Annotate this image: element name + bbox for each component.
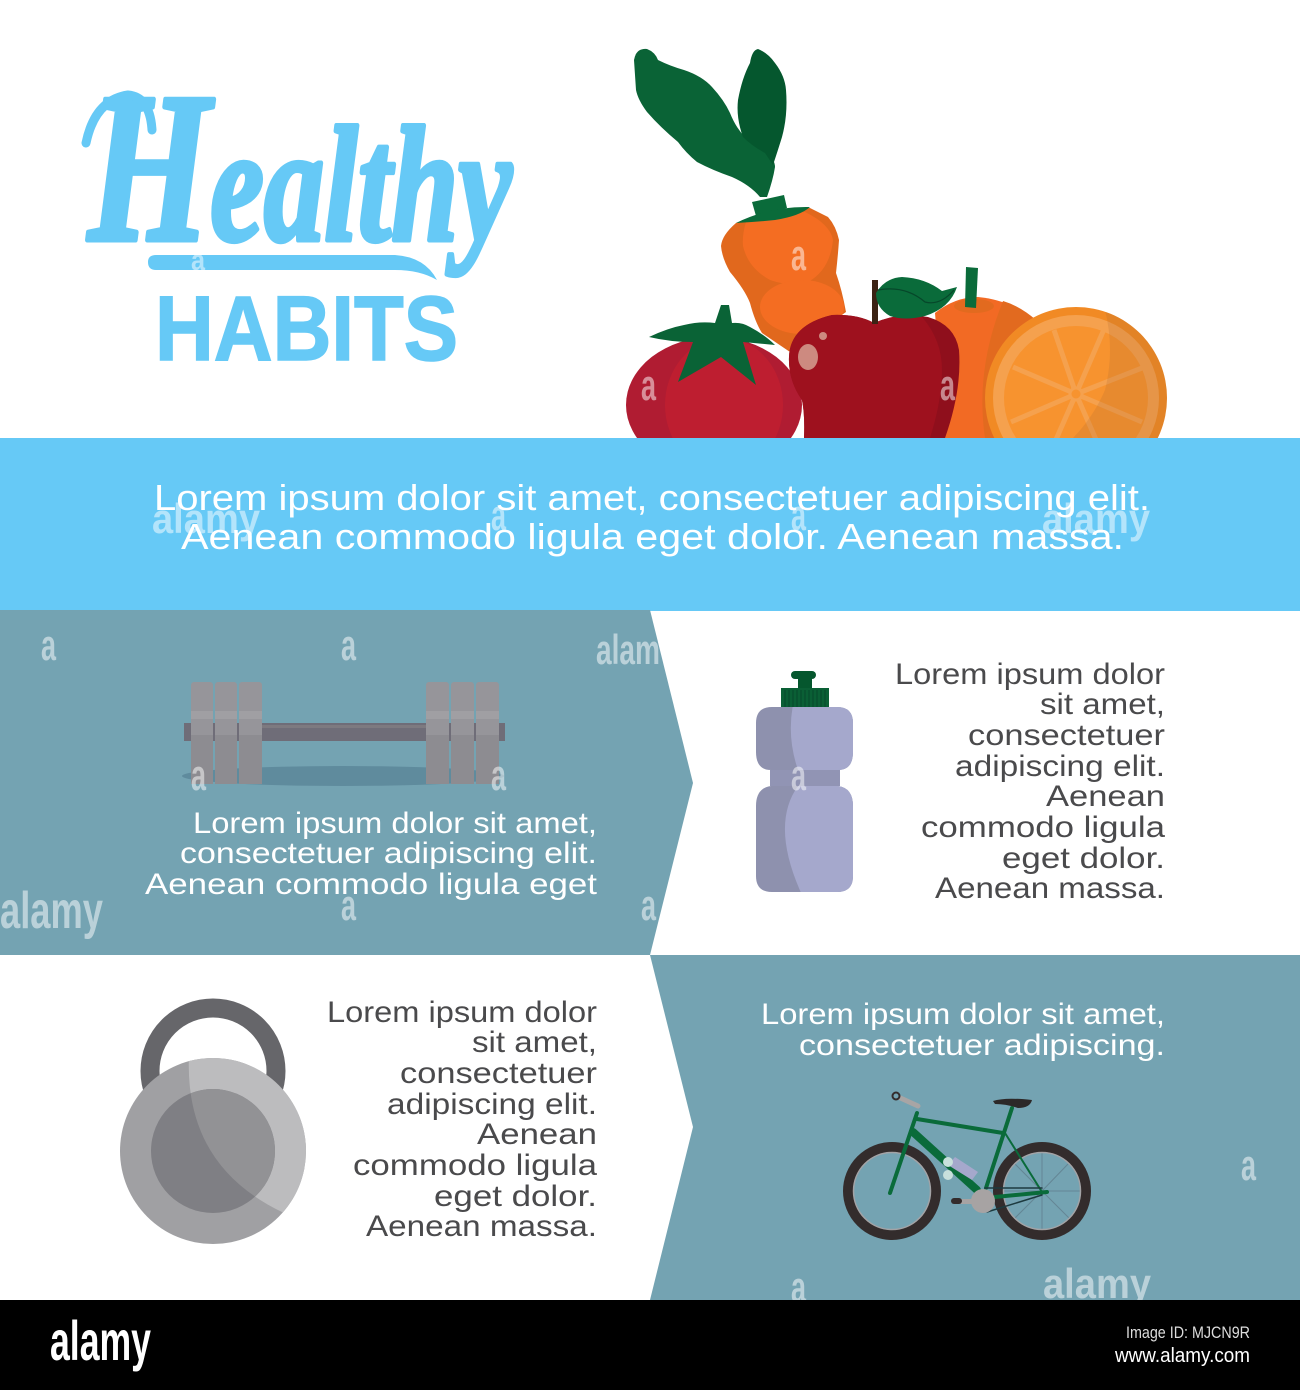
bottle text: consectetuer xyxy=(968,719,1165,752)
icon: apple xyxy=(789,277,959,438)
panel: bicycle xyxy=(650,955,1300,1300)
icon: tomato xyxy=(626,305,802,438)
bicycle text: Lorem ipsum dolor sit amet, xyxy=(761,998,1165,1031)
bottle text: adipiscing elit. xyxy=(955,750,1165,783)
kettlebell text: Lorem ipsum dolor xyxy=(327,996,597,1029)
stock watermarks xyxy=(0,231,1256,1312)
kettlebell text: Aenean xyxy=(477,1118,597,1151)
stock watermarks: a xyxy=(491,751,506,800)
kettlebell text: sit amet, xyxy=(472,1026,597,1059)
title underline swoosh xyxy=(148,255,437,280)
stock watermarks: a xyxy=(191,244,205,277)
stock watermarks: a xyxy=(791,751,806,800)
title: Healthy Habits xyxy=(86,48,513,380)
kettlebell text: commodo ligula xyxy=(353,1149,597,1182)
kettlebell text: adipiscing elit. xyxy=(387,1088,597,1121)
bicycle text xyxy=(761,998,1165,1062)
stock watermarks: a xyxy=(791,1263,806,1312)
dumbbell text: Lorem ipsum dolor sit amet, xyxy=(193,807,597,840)
dumbbell text xyxy=(145,807,598,901)
stock watermarks: a xyxy=(940,361,955,410)
icon: orange slice xyxy=(985,307,1167,438)
stock watermarks: alam xyxy=(596,626,660,673)
dumbbell text: consectetuer adipiscing elit. xyxy=(180,837,597,870)
intro text xyxy=(154,477,1150,557)
stock watermarks: alamy xyxy=(1042,495,1151,542)
panel: dumbbell xyxy=(0,610,693,955)
footer bar xyxy=(0,1300,1300,1390)
stock watermarks: a xyxy=(1241,1141,1256,1190)
stock watermarks: a xyxy=(341,621,356,670)
stock watermarks: a xyxy=(791,491,806,540)
panel: blue intro band xyxy=(0,438,1300,611)
kettlebell text xyxy=(327,996,597,1243)
kettlebell text: eget dolor. xyxy=(434,1180,597,1213)
illustration: fruit and vegetables xyxy=(626,48,1167,438)
word HABITS: HABITS xyxy=(155,278,458,380)
kettlebell text: Aenean massa. xyxy=(366,1210,597,1243)
bottle text: eget dolor. xyxy=(1002,842,1165,875)
footer logo: alamy xyxy=(50,1309,151,1372)
intro text: Lorem ipsum dolor sit amet, consectetuer adipiscing elit. xyxy=(154,477,1150,518)
icon: bicycle xyxy=(848,1092,1086,1235)
panel: water bottle xyxy=(756,658,1165,905)
stock watermarks: a xyxy=(641,881,656,930)
stock watermarks: a xyxy=(341,881,356,930)
bottle text xyxy=(895,658,1165,905)
footer url: www.alamy.com xyxy=(1114,1345,1250,1367)
stock watermarks: alamy xyxy=(152,495,261,542)
bottle text: sit amet, xyxy=(1040,688,1165,721)
stock watermarks: a xyxy=(41,621,56,670)
kettlebell text: consectetuer xyxy=(400,1057,597,1090)
bicycle text: consectetuer adipiscing. xyxy=(799,1029,1165,1062)
stock watermarks: alamy xyxy=(1043,1260,1152,1307)
title flourish xyxy=(86,95,152,143)
script word Healthy: Healthy xyxy=(87,48,513,287)
stock watermarks: a xyxy=(641,361,656,410)
icon: kettlebell xyxy=(120,1008,330,1244)
intro text: Aenean commodo ligula eget dolor. Aenean massa. xyxy=(181,516,1124,557)
bottle text: Aenean xyxy=(1046,780,1165,813)
dumbbell text: Aenean commodo ligula eget xyxy=(145,868,598,901)
bottle text: Aenean massa. xyxy=(935,872,1165,905)
icon: dumbbell xyxy=(182,682,505,786)
stock watermarks: a xyxy=(791,231,806,280)
stock watermarks: a xyxy=(191,751,206,800)
icon: carrot xyxy=(634,49,846,352)
stock watermarks: a xyxy=(491,491,506,540)
bottle text: Lorem ipsum dolor xyxy=(895,658,1165,691)
panel: kettlebell xyxy=(120,996,597,1244)
bottle text: commodo ligula xyxy=(921,811,1165,844)
footer image id: Image ID: MJCN9R xyxy=(1126,1323,1250,1342)
icon: water bottle xyxy=(756,671,860,895)
stock watermarks: alamy xyxy=(0,882,103,940)
icon: orange xyxy=(935,267,1040,438)
